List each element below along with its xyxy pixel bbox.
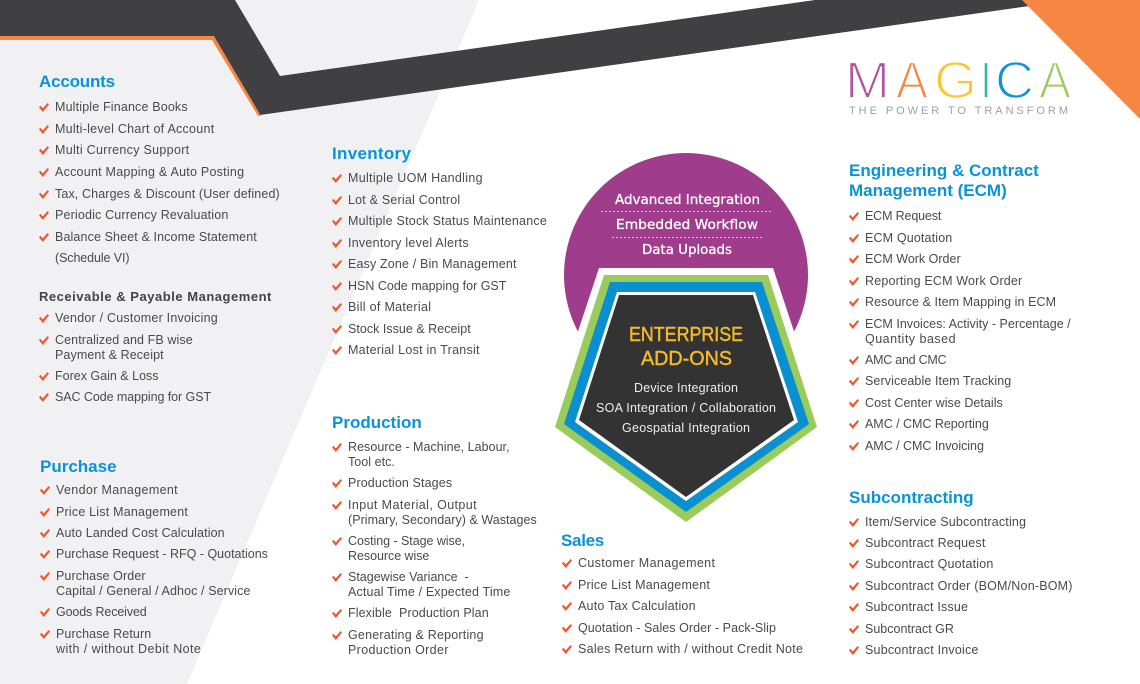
panel: Accounts: Tax, Charges & Discount (User defined) xyxy=(55,187,280,201)
panel: Purchase: Purchase Request - RFQ - Quotations xyxy=(56,547,268,561)
panel: Sales: Sales xyxy=(561,531,604,550)
panel: Sales: Quotation - Sales Order - Pack-Slip xyxy=(578,621,776,635)
panel: Accounts: Forex Gain & Loss xyxy=(55,369,159,383)
panel: Production: Input Material, Output xyxy=(348,498,477,512)
logo: Magica: M xyxy=(845,52,890,110)
panel: Purchase: Auto Landed Cost Calculation xyxy=(56,526,225,540)
panel: Accounts: Receivable & Payable Management xyxy=(39,289,272,304)
panel: Production: Actual Time / Expected Time xyxy=(348,584,510,598)
circle labels xyxy=(615,192,760,258)
panel: Engineering & Contract Management: ECM Invoices: Activity - Percentage / xyxy=(865,317,1071,331)
panel: Engineering & Contract Management: Cost Center wise Details xyxy=(865,396,1003,410)
panel: Engineering & Contract Management: ECM Work Order xyxy=(865,252,961,266)
logo: Magica: A xyxy=(1039,52,1071,110)
panel: Engineering & Contract Management: Management (ECM) xyxy=(849,180,1007,200)
panel: Sales xyxy=(561,531,803,656)
pentagon list xyxy=(596,381,776,435)
panel: Inventory: HSN Code mapping for GST xyxy=(348,279,506,293)
panel: Accounts: (Schedule VI) xyxy=(55,251,129,265)
pentagon list: Device Integration xyxy=(634,381,738,395)
panel: Subcontracting: Subcontract Quotation xyxy=(865,557,994,571)
panel: Purchase: Goods Received xyxy=(56,605,147,619)
panel: Inventory: Inventory level Alerts xyxy=(348,236,469,250)
logo: Magica: C xyxy=(995,52,1034,110)
panel: Production: Resource - Machine, Labour, xyxy=(348,440,510,454)
panel: Engineering & Contract Management: Serviceable Item Tracking xyxy=(865,374,1011,388)
panel: Production: Production Order xyxy=(348,642,449,656)
panel: Purchase: Price List Management xyxy=(56,505,188,519)
logo: Magica: G xyxy=(934,52,977,110)
panel: Engineering & Contract Management: Quantity based xyxy=(865,332,956,346)
panel: Subcontracting: Subcontracting xyxy=(849,488,974,507)
panel: Inventory: Multiple Stock Status Maintenance xyxy=(348,214,547,228)
logo: Magica: THE POWER TO TRANSFORM xyxy=(849,105,1068,117)
panel: Purchase: Purchase xyxy=(40,457,117,476)
panel: Inventory xyxy=(332,144,547,357)
panel: Production: Stagewise Variance - xyxy=(348,570,469,584)
panel: Accounts: Account Mapping & Auto Posting xyxy=(55,165,244,179)
panel: Subcontracting: Subcontract Order (BOM/Non-BOM) xyxy=(865,579,1073,593)
panel: Accounts: Centralized and FB wise xyxy=(55,333,193,347)
panel: Inventory: Bill of Material xyxy=(348,300,431,314)
title: Enterprise Add-Ons xyxy=(629,323,743,370)
panel: Production: Generating & Reporting xyxy=(348,628,484,642)
purple circle xyxy=(564,153,808,397)
panel: Engineering & Contract Management xyxy=(849,161,1071,453)
panel: Accounts: Multi-level Chart of Account xyxy=(55,122,214,136)
panel: Purchase: Purchase Return xyxy=(56,627,151,641)
pentagon xyxy=(555,275,817,522)
panel: Accounts: Balance Sheet & Income Statement xyxy=(55,230,257,244)
panel: Production: Production xyxy=(332,413,422,432)
panel: Accounts: SAC Code mapping for GST xyxy=(55,390,211,404)
panel: Subcontracting: Subcontract Request xyxy=(865,536,986,550)
panel: Accounts: Multiple Finance Books xyxy=(55,100,188,114)
panel: Purchase: Vendor Management xyxy=(56,483,178,497)
panel: Accounts: Multi Currency Support xyxy=(55,143,189,157)
logo: Magica: A xyxy=(896,52,928,110)
title: Enterprise Add-Ons: ADD-ONS xyxy=(641,347,732,370)
panel: Inventory: Easy Zone / Bin Management xyxy=(348,257,517,271)
panel: Sales: Price List Management xyxy=(578,578,710,592)
panel: Inventory: Inventory xyxy=(332,144,411,163)
panel: Engineering & Contract Management: AMC and CMC xyxy=(865,353,946,367)
panel: Inventory: Lot & Serial Control xyxy=(348,193,460,207)
panel: Inventory: Stock Issue & Receipt xyxy=(348,322,471,336)
panel: Sales: Auto Tax Calculation xyxy=(578,599,696,613)
circle labels: Embedded Workflow xyxy=(616,217,758,233)
panel: Production xyxy=(332,413,537,656)
panel: Production: Tool etc. xyxy=(348,454,395,468)
panel: Accounts: Payment & Receipt xyxy=(55,348,164,362)
panel: Purchase: Purchase Order xyxy=(56,569,146,583)
pentagon list: Geospatial Integration xyxy=(622,421,750,435)
panel: Subcontracting: Item/Service Subcontracting xyxy=(865,515,1026,529)
panel: Sales: Customer Management xyxy=(578,556,715,570)
panel: Engineering & Contract Management: AMC / CMC Invoicing xyxy=(865,439,984,453)
panel: Accounts: Periodic Currency Revaluation xyxy=(55,208,228,222)
panel: Engineering & Contract Management: Engineering & Contract xyxy=(849,161,1039,180)
panel: Engineering & Contract Management: Resource & Item Mapping in ECM xyxy=(865,295,1056,309)
panel: Production: Production Stages xyxy=(348,476,452,490)
pentagon list: SOA Integration / Collaboration xyxy=(596,401,776,415)
panel: Engineering & Contract Management: ECM Request xyxy=(865,209,941,223)
panel: Engineering & Contract Management: AMC / CMC Reporting xyxy=(865,417,989,431)
panel: Sales: Sales Return with / without Credit Note xyxy=(578,642,803,656)
panel: Subcontracting: Subcontract GR xyxy=(865,622,954,636)
panel: Engineering & Contract Management: ECM Quotation xyxy=(865,231,952,245)
panel: Inventory: Material Lost in Transit xyxy=(348,343,480,357)
panel: Subcontracting xyxy=(849,488,1073,657)
panel: Purchase: with / without Debit Note xyxy=(56,642,201,656)
title: Enterprise Add-Ons: ENTERPRISE xyxy=(629,323,743,346)
logo: Magica xyxy=(845,52,1071,117)
panel: Production: Resource wise xyxy=(348,548,429,562)
panel: Subcontracting: Subcontract Issue xyxy=(865,600,968,614)
panel: Production: Flexible Production Plan xyxy=(348,606,489,620)
panel: Engineering & Contract Management: Reporting ECM Work Order xyxy=(865,274,1022,288)
circle labels: Advanced Integration xyxy=(615,192,760,208)
panel: Purchase xyxy=(40,457,268,656)
panel: Accounts: Accounts xyxy=(39,72,115,91)
panel: Production: Costing - Stage wise, xyxy=(348,534,465,548)
panel: Subcontracting: Subcontract Invoice xyxy=(865,643,979,657)
panel: Production: (Primary, Secondary) & Wastages xyxy=(348,512,537,526)
panel: Purchase: Capital / General / Adhoc / Service xyxy=(56,584,251,598)
logo: Magica: I xyxy=(980,52,992,110)
panel: Inventory: Multiple UOM Handling xyxy=(348,171,483,185)
panel: Accounts xyxy=(39,72,280,404)
panel: Accounts: Vendor / Customer Invoicing xyxy=(55,311,218,325)
circle labels: Data Uploads xyxy=(642,242,732,258)
